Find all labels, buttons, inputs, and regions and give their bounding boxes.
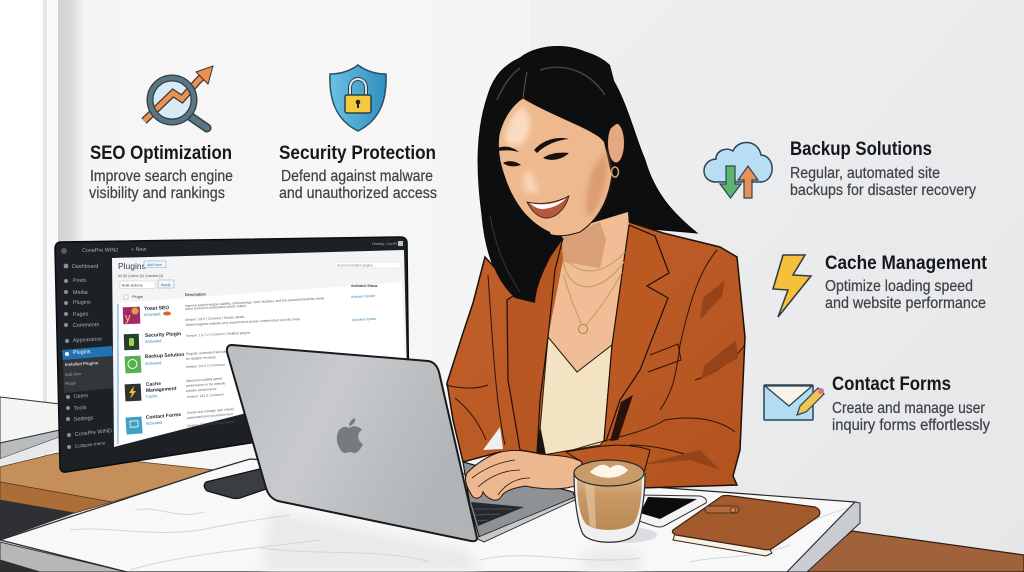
feature: Contact Forms bbox=[764, 374, 990, 434]
plugin row: Backup Solution: Version: 3.0.9.3 | Common bbox=[186, 363, 225, 369]
dark inner shadow bbox=[536, 425, 546, 455]
plugin row: Backup Solution: for disaster recovery bbox=[186, 355, 216, 361]
plugin row: Yoast SEO: Yoast SEO bbox=[144, 305, 169, 312]
blazer bbox=[447, 222, 745, 488]
woman at desk bbox=[446, 46, 745, 488]
keyboard bbox=[471, 502, 524, 526]
feature: Security Protection: Defend against malware bbox=[281, 168, 433, 185]
admin top bar text: + New bbox=[131, 247, 147, 253]
feature: Security Protection: Security Protection bbox=[279, 143, 436, 164]
plugin row: Contact Forms: Create and manage user inquiry bbox=[187, 407, 234, 415]
admin top bar text: Howdy, ConPr bbox=[372, 241, 398, 246]
ear and earring bbox=[608, 123, 624, 177]
admin top bar text: ConePre WIN2 bbox=[82, 247, 118, 254]
blazer shadow accents bbox=[640, 280, 738, 470]
icon: magnifier with growth arrow bbox=[144, 66, 213, 128]
sidebar menu: Installed Plugins bbox=[65, 360, 99, 367]
page heading and controls: Activated Status bbox=[351, 284, 378, 288]
marble desk bbox=[0, 459, 860, 572]
plugin row: Yoast SEO: Improve search engine visibility, acknowledge, read mistakes, and the essential backlinks areas bbox=[185, 296, 325, 308]
desk reflections bbox=[262, 510, 640, 572]
sidebar menu: ConePre WIND bbox=[75, 428, 112, 438]
monitor frame bbox=[55, 237, 409, 472]
left side table and floor bbox=[0, 397, 215, 572]
coffee glass bbox=[574, 460, 657, 543]
page heading and controls: All (5) | Active (5) | Inactive (0) bbox=[118, 274, 163, 278]
necklaces bbox=[562, 250, 625, 328]
plugin row: Contact Forms bbox=[125, 407, 234, 435]
sidebar menu: Dashboard bbox=[72, 264, 98, 270]
feature: SEO Optimization: visibility and rankings bbox=[89, 185, 225, 202]
laptop bbox=[227, 345, 575, 542]
icon: lightning bolt bbox=[773, 255, 811, 317]
plugin row: Contact Forms: Version: 3.0.9.3 | Contact Forms bbox=[187, 420, 234, 428]
sidebar menu: Comments bbox=[73, 322, 99, 329]
sidebar menu: Collapse menu bbox=[75, 440, 106, 449]
feature: Contact Forms: Create and manage user bbox=[832, 400, 985, 417]
feature: Backup Solutions: backups for disaster recovery bbox=[790, 182, 976, 199]
plugin row: Security Plugin: Security Plugin bbox=[145, 331, 181, 339]
sidebar menu: Pages bbox=[73, 311, 89, 318]
neck and chest bbox=[548, 212, 630, 372]
sidebar menu: Add New bbox=[65, 371, 81, 377]
plugin row: Cache Management: performance in the website bbox=[186, 381, 226, 388]
plugin row: Yoast SEO: Activated Update bbox=[351, 294, 376, 299]
page heading and controls: Description bbox=[185, 292, 207, 297]
plugin row: Backup Solution bbox=[125, 348, 256, 373]
latte foam bbox=[574, 460, 644, 486]
wall gap between sleeve and torso bbox=[483, 427, 503, 450]
feature: SEO Optimization: Improve search engine bbox=[90, 168, 233, 185]
blazer folds and pocket bbox=[446, 250, 745, 462]
plugin row: Cache Management bbox=[125, 376, 226, 401]
front hair bbox=[478, 48, 625, 303]
plugin row: Backup Solution: Regular, automated site backups that cover files bbox=[186, 348, 256, 356]
plugin row: Contact Forms: Contact Forms bbox=[146, 412, 182, 421]
ports edge bbox=[476, 497, 575, 542]
feature: SEO Optimization bbox=[89, 66, 233, 202]
sidebar menu bbox=[62, 264, 113, 449]
sidebar menu: Posts bbox=[73, 278, 87, 284]
feature: Contact Forms: inquiry forms effortlessly bbox=[832, 417, 990, 434]
feature: Cache Management bbox=[773, 253, 988, 317]
marble veins bbox=[70, 508, 848, 570]
feature: Backup Solutions: Backup Solutions bbox=[790, 139, 932, 160]
plugin row: Cache Management: website performance bbox=[186, 387, 217, 393]
sidebar menu: Tools bbox=[74, 405, 87, 412]
forehead light bbox=[505, 106, 530, 146]
smartphone on desk bbox=[636, 495, 706, 527]
smile bbox=[527, 196, 569, 218]
dark blazer opening bbox=[610, 395, 633, 441]
face bbox=[498, 98, 612, 236]
eyes bbox=[503, 153, 569, 166]
plugins page content bbox=[112, 250, 407, 447]
nose bbox=[524, 172, 540, 193]
feature: Cache Management: and website performance bbox=[825, 295, 986, 312]
plugin row: Yoast SEO: Activated bbox=[144, 311, 160, 317]
page heading and controls: Plugins bbox=[118, 261, 146, 271]
page heading and controls: Add New bbox=[147, 263, 162, 267]
page heading and controls: Apply bbox=[161, 283, 171, 287]
feature: Cache Management: Optimize loading speed bbox=[825, 278, 973, 295]
feature: SEO Optimization: SEO Optimization bbox=[90, 143, 232, 164]
plugin row: Security Plugin: Activated bbox=[145, 338, 161, 344]
leather notebook bbox=[672, 496, 820, 556]
plugin row: Cache Management: Optimizes loading speed bbox=[186, 376, 222, 383]
plugin row: Cache Management: Cache bbox=[146, 393, 158, 399]
sidebar menu: Plugin bbox=[65, 380, 76, 386]
page heading and controls: Search installed plugins... bbox=[337, 264, 376, 268]
plugin row: Yoast SEO: some content to understand what's added. bbox=[185, 304, 247, 311]
cheek shade bbox=[586, 150, 607, 216]
sidebar menu: Plugins bbox=[73, 300, 91, 306]
feature: Contact Forms: Contact Forms bbox=[832, 374, 951, 395]
floor right bbox=[800, 531, 1024, 572]
monitor showing plugins dashboard bbox=[55, 237, 409, 472]
sidebar menu: Media bbox=[73, 290, 88, 296]
page heading and controls: Plugin bbox=[132, 294, 143, 299]
sidebar menu: Plugins bbox=[73, 349, 91, 356]
plugin row: Yoast SEO bbox=[123, 294, 376, 324]
plugin row: Security Plugin: Activated Update bbox=[352, 317, 377, 322]
lapels bbox=[604, 225, 669, 441]
plugin row: Cache Management: Management bbox=[146, 386, 177, 394]
plugin row: Cache Management: Version: 242.3 | Common bbox=[187, 392, 224, 399]
apple logo bbox=[337, 418, 363, 453]
icon: cloud with arrows bbox=[704, 142, 772, 198]
eyebrows bbox=[498, 138, 569, 153]
laptop base bbox=[463, 462, 575, 540]
plugin row: Contact Forms: automated and convenient form bbox=[187, 412, 234, 420]
plugin row: Cache Management: Cache bbox=[146, 381, 161, 388]
plugin row: Yoast SEO: y bbox=[125, 312, 131, 324]
plugin row: Security Plugin bbox=[124, 317, 377, 350]
feature: Cache Management: Cache Management bbox=[825, 253, 988, 274]
feature: Backup Solutions: Regular, automated site bbox=[790, 165, 940, 182]
small dark phone behind laptop bbox=[204, 467, 272, 498]
sidebar menu: Settings bbox=[74, 415, 94, 423]
sidebar menu: Users bbox=[74, 393, 88, 400]
plugin row: Backup Solution: Backup Solution bbox=[145, 352, 185, 360]
icon: shield with padlock bbox=[330, 65, 386, 131]
hair back bbox=[478, 46, 697, 303]
admin top bar text bbox=[61, 241, 403, 254]
plugin row: Security Plugin: Version: 1.0.7.2 | Common | Related plugins bbox=[186, 331, 251, 338]
plugin row: Contact Forms: Activated bbox=[146, 420, 162, 426]
camisole bbox=[540, 337, 612, 455]
hand on keyboard bbox=[466, 450, 582, 500]
feature: Security Protection bbox=[279, 65, 437, 202]
sidebar menu: Appearance bbox=[73, 336, 102, 344]
feature: Security Protection: and unauthorized access bbox=[279, 185, 437, 202]
laptop lid bbox=[227, 345, 477, 541]
necklace pendant bbox=[578, 324, 588, 334]
icon: envelope with pencil bbox=[764, 385, 824, 420]
plugin row: Yoast SEO: Version: 3.8.5 | Common | Private details bbox=[185, 315, 245, 322]
feature: Backup Solutions bbox=[704, 139, 976, 199]
blazer cuff bbox=[566, 445, 650, 488]
page heading and controls bbox=[118, 261, 400, 299]
plugin row: Security Plugin: Defend against malware and unauthorized access unauthorized security notes bbox=[186, 317, 301, 327]
plugin row: Backup Solution: Activated bbox=[145, 360, 161, 366]
page heading and controls: Bulk actions bbox=[122, 284, 143, 288]
